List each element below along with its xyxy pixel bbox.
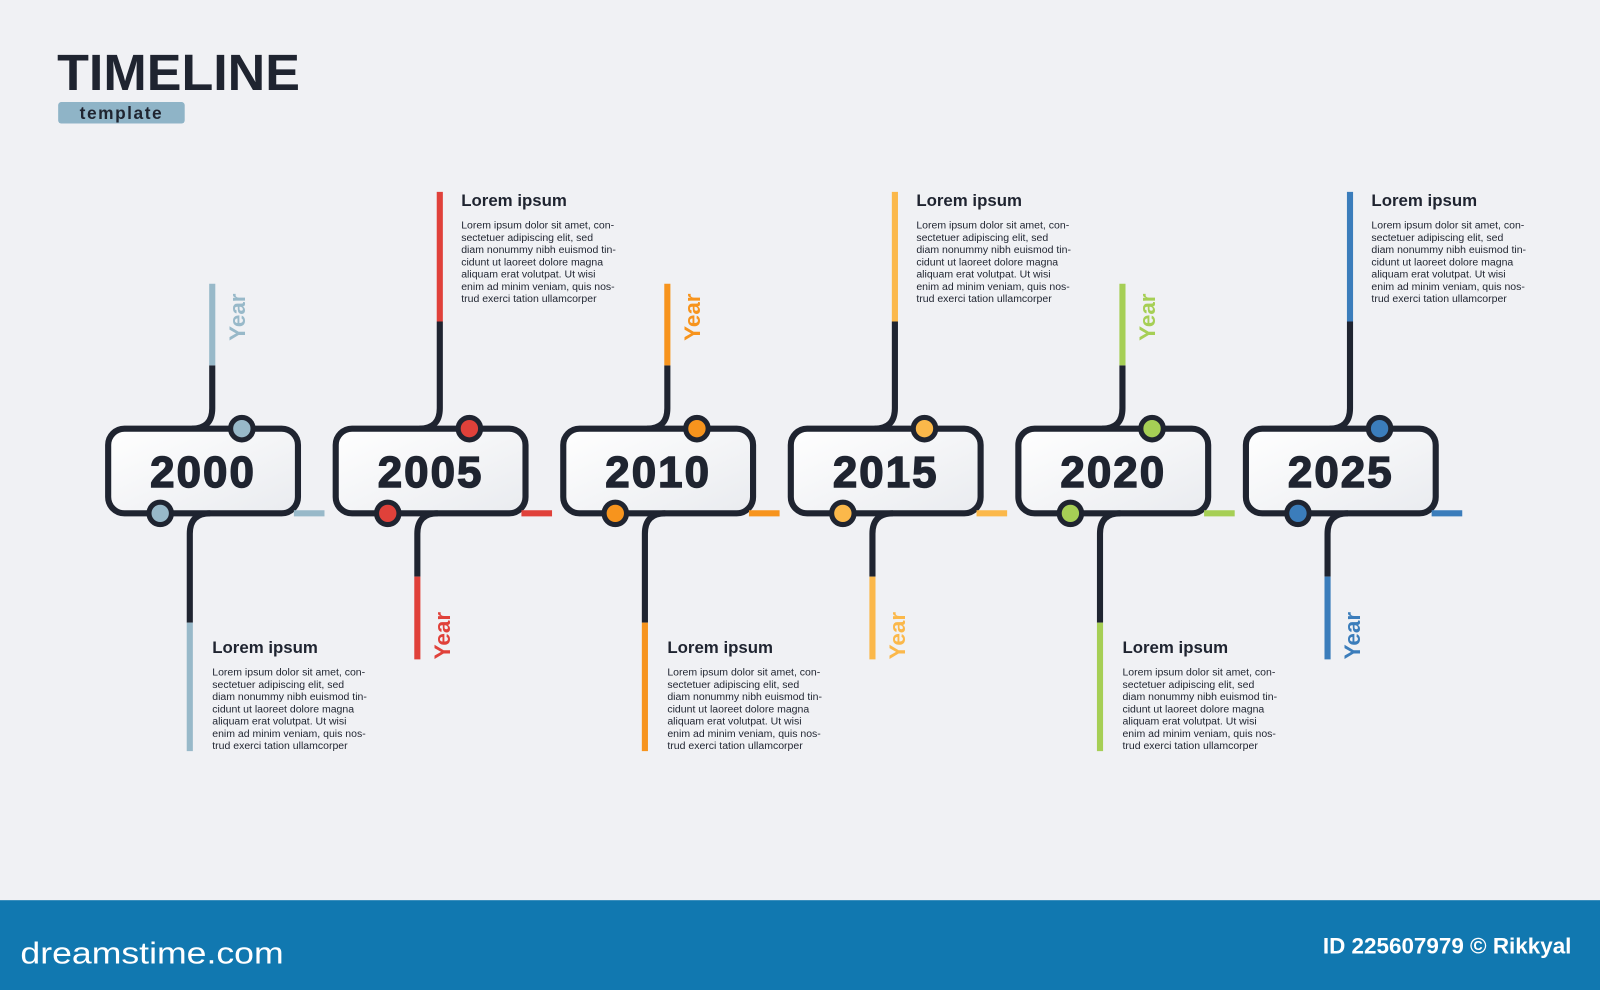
- text block: Lorem ipsum: [667, 638, 773, 657]
- milestone: 2010: 2010: [605, 448, 711, 497]
- milestone: 2025: Year: [1340, 612, 1365, 659]
- text block: Lorem ipsum dolor sit amet, con-: [461, 220, 615, 232]
- text block: diam nonummy nibh euismod tin-: [667, 691, 822, 703]
- text block: cidunt ut laoreet dolore magna: [916, 256, 1058, 268]
- text block: enim ad minim veniam, quis nos-: [461, 281, 615, 293]
- text block: Lorem ipsum: [212, 638, 318, 657]
- footer bar: [0, 900, 1600, 990]
- milestone: 2015: [791, 191, 1071, 659]
- milestone: 2025: [1246, 191, 1527, 659]
- text block: Lorem ipsum dolor sit amet, con-: [667, 667, 821, 679]
- text block: sectetuer adipiscing elit, sed: [461, 232, 593, 244]
- text block: sectetuer adipiscing elit, sed: [667, 679, 799, 691]
- text block: cidunt ut laoreet dolore magna: [461, 256, 603, 268]
- text block: cidunt ut laoreet dolore magna: [1371, 256, 1513, 268]
- text block: [667, 638, 822, 752]
- text block: Lorem ipsum: [916, 191, 1022, 210]
- text block: [916, 191, 1071, 305]
- text block: cidunt ut laoreet dolore magna: [667, 703, 809, 715]
- text block: Lorem ipsum: [1371, 191, 1477, 210]
- text block: [212, 638, 367, 752]
- text block: [1371, 191, 1527, 305]
- text block: [461, 191, 616, 305]
- text block: cidunt ut laoreet dolore magna: [212, 703, 354, 715]
- text block: trud exerci tation ullamcorper: [1371, 293, 1507, 305]
- milestone: 2025: 2025: [1288, 448, 1394, 497]
- text block: enim ad minim veniam, quis nos-: [667, 728, 821, 740]
- footer id: ID 225607979 © Rikkyal: [1323, 933, 1571, 958]
- milestone: 2005: Year: [430, 612, 455, 659]
- text block: diam nonummy nibh euismod tin-: [1371, 244, 1527, 256]
- text block: Lorem ipsum dolor sit amet, con-: [212, 667, 366, 679]
- text block: Lorem ipsum: [1122, 638, 1228, 657]
- milestone: 2010: Year: [680, 293, 705, 341]
- text block: Lorem ipsum dolor sit amet, con-: [916, 220, 1070, 232]
- text block: trud exerci tation ullamcorper: [667, 740, 803, 752]
- milestone: 2005: 2005: [378, 448, 483, 497]
- text block: trud exerci tation ullamcorper: [1122, 740, 1258, 752]
- text block: Lorem ipsum dolor sit amet, con-: [1371, 220, 1525, 232]
- text block: sectetuer adipiscing elit, sed: [212, 679, 344, 691]
- text block: diam nonummy nibh euismod tin-: [461, 244, 616, 256]
- text block: enim ad minim veniam, quis nos-: [916, 281, 1070, 293]
- text block: diam nonummy nibh euismod tin-: [212, 691, 367, 703]
- milestone: 2020: [1018, 284, 1278, 752]
- milestone: 2000: 2000: [150, 448, 256, 497]
- text block: enim ad minim veniam, quis nos-: [1122, 728, 1276, 740]
- text block: cidunt ut laoreet dolore magna: [1122, 703, 1264, 715]
- milestone: 2015: 2015: [833, 448, 939, 497]
- badge: template: [58, 102, 185, 123]
- text block: enim ad minim veniam, quis nos-: [212, 728, 366, 740]
- text block: sectetuer adipiscing elit, sed: [1122, 679, 1255, 691]
- text block: Lorem ipsum: [461, 191, 567, 210]
- text block: Lorem ipsum dolor sit amet, con-: [1122, 667, 1276, 679]
- text block: aliquam erat volutpat. Ut wisi: [1371, 269, 1506, 281]
- milestone: 2020: 2020: [1060, 448, 1166, 497]
- text block: aliquam erat volutpat. Ut wisi: [916, 269, 1051, 281]
- text block: aliquam erat volutpat. Ut wisi: [212, 716, 346, 728]
- text block: [1122, 638, 1278, 752]
- milestone: 2005: [336, 191, 616, 659]
- text block: diam nonummy nibh euismod tin-: [916, 244, 1071, 256]
- text block: enim ad minim veniam, quis nos-: [1371, 281, 1525, 293]
- milestone: 2000: Year: [225, 293, 250, 341]
- title: TIMELINE: [57, 44, 300, 101]
- text block: trud exerci tation ullamcorper: [461, 293, 597, 305]
- text block: aliquam erat volutpat. Ut wisi: [1122, 716, 1257, 728]
- text block: sectetuer adipiscing elit, sed: [1371, 232, 1503, 244]
- text block: sectetuer adipiscing elit, sed: [916, 232, 1048, 244]
- milestone: 2020: Year: [1135, 293, 1160, 341]
- milestone: 2010: [563, 284, 822, 752]
- milestone: 2015: Year: [885, 612, 910, 659]
- text block: aliquam erat volutpat. Ut wisi: [667, 716, 802, 728]
- text block: trud exerci tation ullamcorper: [212, 740, 348, 752]
- footer logo: dreamstime.com: [20, 936, 284, 970]
- badge: template: template: [80, 103, 163, 123]
- text block: aliquam erat volutpat. Ut wisi: [461, 269, 595, 281]
- text block: diam nonummy nibh euismod tin-: [1122, 691, 1278, 703]
- text block: trud exerci tation ullamcorper: [916, 293, 1052, 305]
- milestone: 2000: [108, 284, 367, 752]
